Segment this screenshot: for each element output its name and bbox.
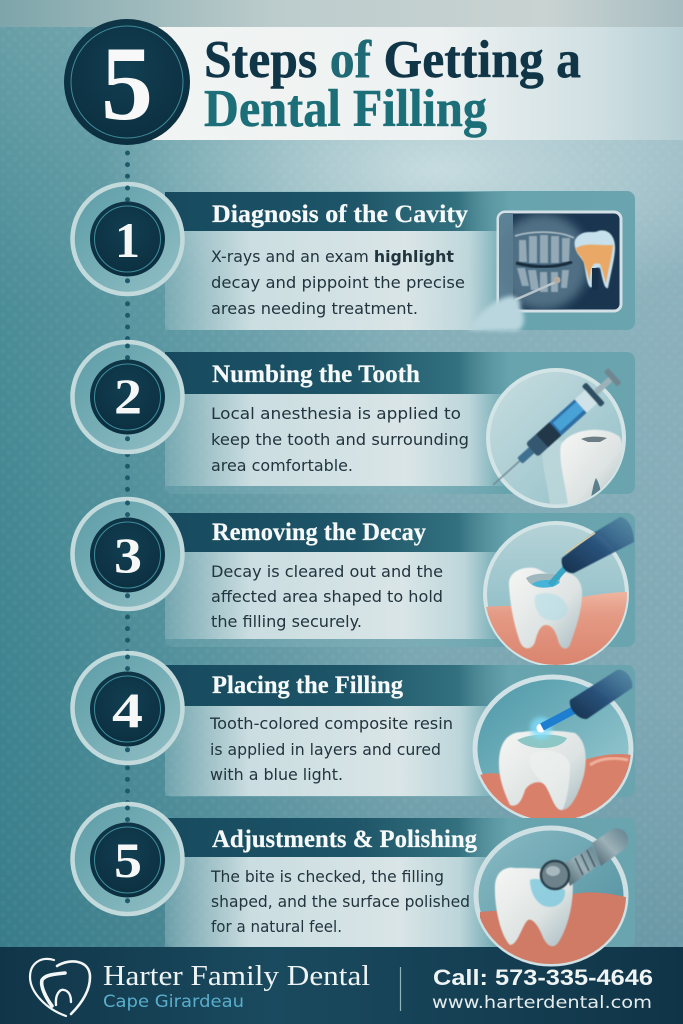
gloved hand <box>468 296 524 331</box>
step 5 text: shaped, and the surface polished <box>211 892 470 911</box>
step 4 heading: Placing the Filling <box>212 670 403 699</box>
step 3 text: the filling securely. <box>211 612 362 631</box>
dental probe <box>515 281 558 300</box>
step 3 heading: Removing the Decay <box>212 517 426 546</box>
icon: drill on tooth <box>485 517 634 670</box>
icon: x-ray and tooth <box>468 212 621 331</box>
tooth <box>495 868 573 946</box>
step 4 text: Tooth-colored composite resin <box>209 714 453 733</box>
composite resin <box>517 734 567 748</box>
footer <box>0 947 683 1024</box>
step badge 2 <box>72 342 182 452</box>
step badge 5 <box>72 804 182 914</box>
step badge 4: 4 <box>112 682 143 738</box>
step 5 heading: Adjustments & Polishing <box>212 824 477 853</box>
syringe <box>484 365 624 495</box>
footer divider <box>400 967 402 1011</box>
step 5 text <box>210 867 470 936</box>
step 4 text: is applied in layers and cured <box>210 740 441 759</box>
step badge 5: 5 <box>114 832 142 888</box>
step 2 heading: Numbing the Tooth <box>212 359 420 388</box>
step badge 3 <box>72 499 182 609</box>
gum <box>485 592 630 670</box>
footer practice name: Harter Family Dental <box>103 961 370 992</box>
step 2 text: area comfortable. <box>211 456 353 475</box>
curing handpiece <box>570 670 632 719</box>
panel: step 2 numbing <box>165 352 635 506</box>
drill tip <box>550 567 566 585</box>
title badge: number 5: 5 <box>101 25 153 142</box>
title line 1: Steps of Getting a <box>204 31 581 89</box>
light guide <box>542 709 576 727</box>
light glow <box>530 717 552 739</box>
footer location: Cape Girardeau <box>103 992 244 1012</box>
footer logo: tooth <box>30 959 90 1016</box>
cavity <box>526 574 560 588</box>
step badge 1: 1 <box>115 212 140 268</box>
step badge 3: 3 <box>114 527 142 583</box>
polish speckles <box>530 879 565 907</box>
step 4 text <box>209 714 453 784</box>
panel: step 3 removing decay <box>165 513 635 670</box>
gum <box>480 754 631 818</box>
step 3 text <box>211 562 443 631</box>
tooth <box>499 731 586 810</box>
icon: polisher on tooth <box>476 828 630 970</box>
icon: syringe and tooth <box>484 365 624 506</box>
panel: step 1 diagnosis <box>165 191 635 331</box>
step 1 text: X-rays and an exam highlight <box>211 247 454 266</box>
step 1 text <box>211 247 465 318</box>
footer phone: Call: 573-335-4646 <box>433 965 653 990</box>
title <box>204 31 581 138</box>
step 5 text: The bite is checked, the filling <box>210 867 444 886</box>
step 4 text: with a blue light. <box>210 765 343 784</box>
title line 2: Dental Filling <box>204 80 487 138</box>
tooth <box>509 568 582 649</box>
step 3 text: Decay is cleared out and the <box>211 562 443 581</box>
step 1 text: areas needing treatment. <box>211 299 418 318</box>
x-ray highlighted tooth <box>575 230 615 288</box>
drill handpiece <box>562 517 634 573</box>
step 3 text: affected area shaped to hold <box>211 587 443 606</box>
icon: curing light on tooth <box>475 670 632 825</box>
title band <box>140 27 683 140</box>
step 1 text: decay and pippoint the precise <box>211 273 465 292</box>
step 5 text: for a natural feel. <box>211 917 342 936</box>
gum <box>480 892 630 970</box>
step 2 text <box>211 404 469 475</box>
title badge: number 5 <box>64 19 190 145</box>
step 2 text: keep the tooth and surrounding <box>211 430 469 449</box>
panel: step 4 placing filling <box>165 665 635 825</box>
step 2 text: Local anesthesia is applied to <box>211 404 461 423</box>
step badge 2: 2 <box>114 368 142 424</box>
step badge 1 <box>72 184 182 294</box>
footer website: www.harterdental.com <box>432 993 652 1013</box>
panel: step 5 polishing <box>165 818 635 970</box>
step badge 4 <box>72 653 182 763</box>
polisher handpiece <box>541 828 628 889</box>
step 1 heading: Diagnosis of the Cavity <box>212 199 468 228</box>
connector dotted line <box>125 153 130 812</box>
